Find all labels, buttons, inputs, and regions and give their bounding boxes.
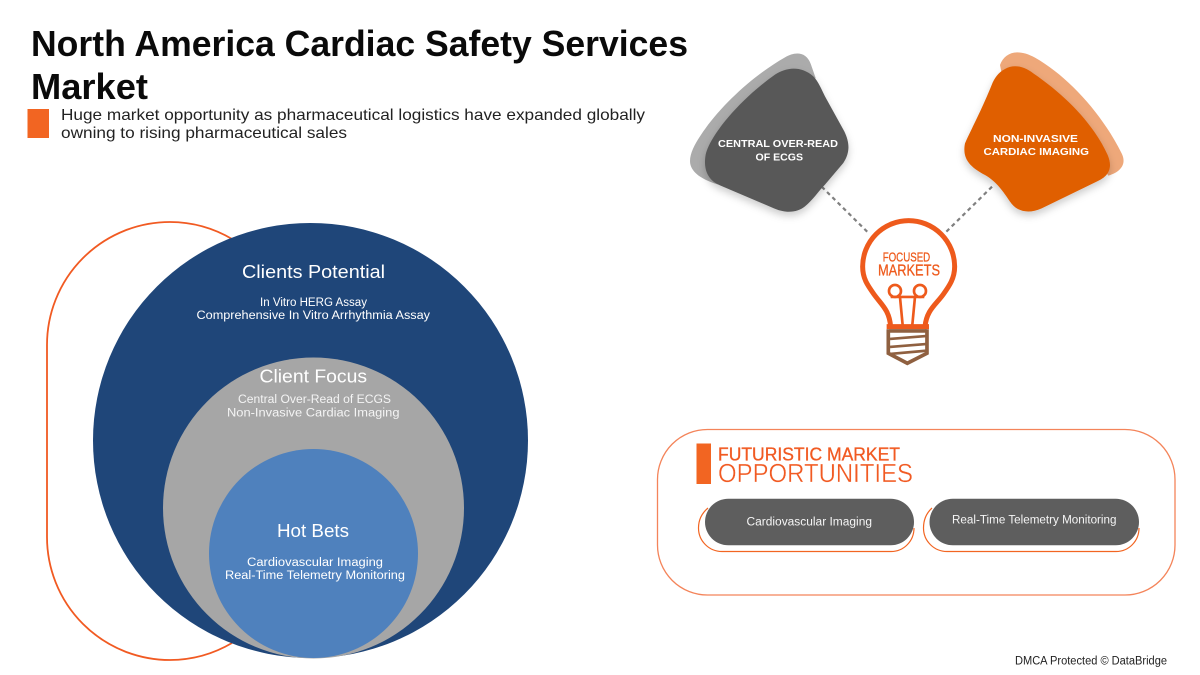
title: North America Cardiac Safety Services [31, 23, 688, 64]
text: hot bets: Hot Bets [277, 521, 349, 541]
text: clients potential [196, 262, 430, 322]
text: hot bets [225, 521, 405, 582]
text: client focus: Non-Invasive Cardiac Imaging [227, 408, 400, 420]
heading: OPPORTUNITIES [718, 460, 913, 488]
text: client focus [227, 366, 400, 420]
heading: FUTURISTIC MARKET [718, 445, 900, 465]
circle: client focus [163, 358, 464, 658]
connector: dashed right [946, 187, 992, 232]
orange rounded outline [47, 222, 232, 660]
panel: focused markets [690, 52, 1124, 363]
text: clients potential: Comprehensive In Vitro Arrhythmia Assay [196, 310, 430, 322]
pill: cardiovascular imaging [698, 499, 914, 552]
circle: hot bets [209, 449, 418, 658]
text: client focus: Client Focus [260, 366, 367, 386]
text: clients potential: Clients Potential [242, 262, 385, 282]
shape: central over-read [690, 53, 848, 212]
title [31, 23, 688, 107]
text: hot bets: Cardiovascular Imaging [247, 557, 383, 569]
panel: futuristic market opportunities [658, 430, 1175, 595]
text: focused markets: MARKETS [878, 262, 940, 280]
panel: nested circles diagram [47, 222, 528, 660]
pill: cardiovascular imaging: Cardiovascular Imaging [746, 516, 872, 528]
shape: non-invasive cardiac imaging [964, 52, 1124, 211]
connector: dashed left [822, 187, 869, 234]
subtitle block [28, 107, 645, 142]
text: hot bets: Real-Time Telemetry Monitoring [225, 570, 405, 582]
subtitle text: owning to rising pharmaceutical sales [61, 125, 347, 142]
shape: non-invasive cardiac imaging: NON-INVASIVE [993, 133, 1078, 145]
icon: light bulb [863, 221, 955, 363]
text: client focus: Central Over-Read of ECGS [238, 394, 391, 406]
icon: orange bar [696, 444, 711, 484]
shape: central over-read: CENTRAL OVER-READ [718, 138, 838, 150]
text: focused markets [878, 250, 940, 280]
subtitle text: Huge market opportunity as pharmaceutical logistics have expanded globally [61, 107, 645, 124]
text: focused markets: FOCUSED [883, 250, 930, 264]
shape: non-invasive cardiac imaging: CARDIAC IMAGING [984, 146, 1089, 158]
circle: clients potential [93, 223, 528, 658]
subtitle text [61, 107, 645, 142]
text: clients potential: In Vitro HERG Assay [260, 297, 367, 309]
title: Market [31, 66, 148, 107]
heading [718, 445, 913, 488]
panel outline [658, 430, 1175, 595]
footer credit: DMCA Protected © DataBridge [1015, 656, 1167, 668]
icon: orange square bullet [28, 109, 49, 138]
pill: real-time telemetry monitoring [924, 499, 1139, 552]
shape: central over-read: OF ECGS [756, 152, 803, 164]
pill: real-time telemetry monitoring: Real-Time Telemetry Monitoring [952, 514, 1116, 526]
